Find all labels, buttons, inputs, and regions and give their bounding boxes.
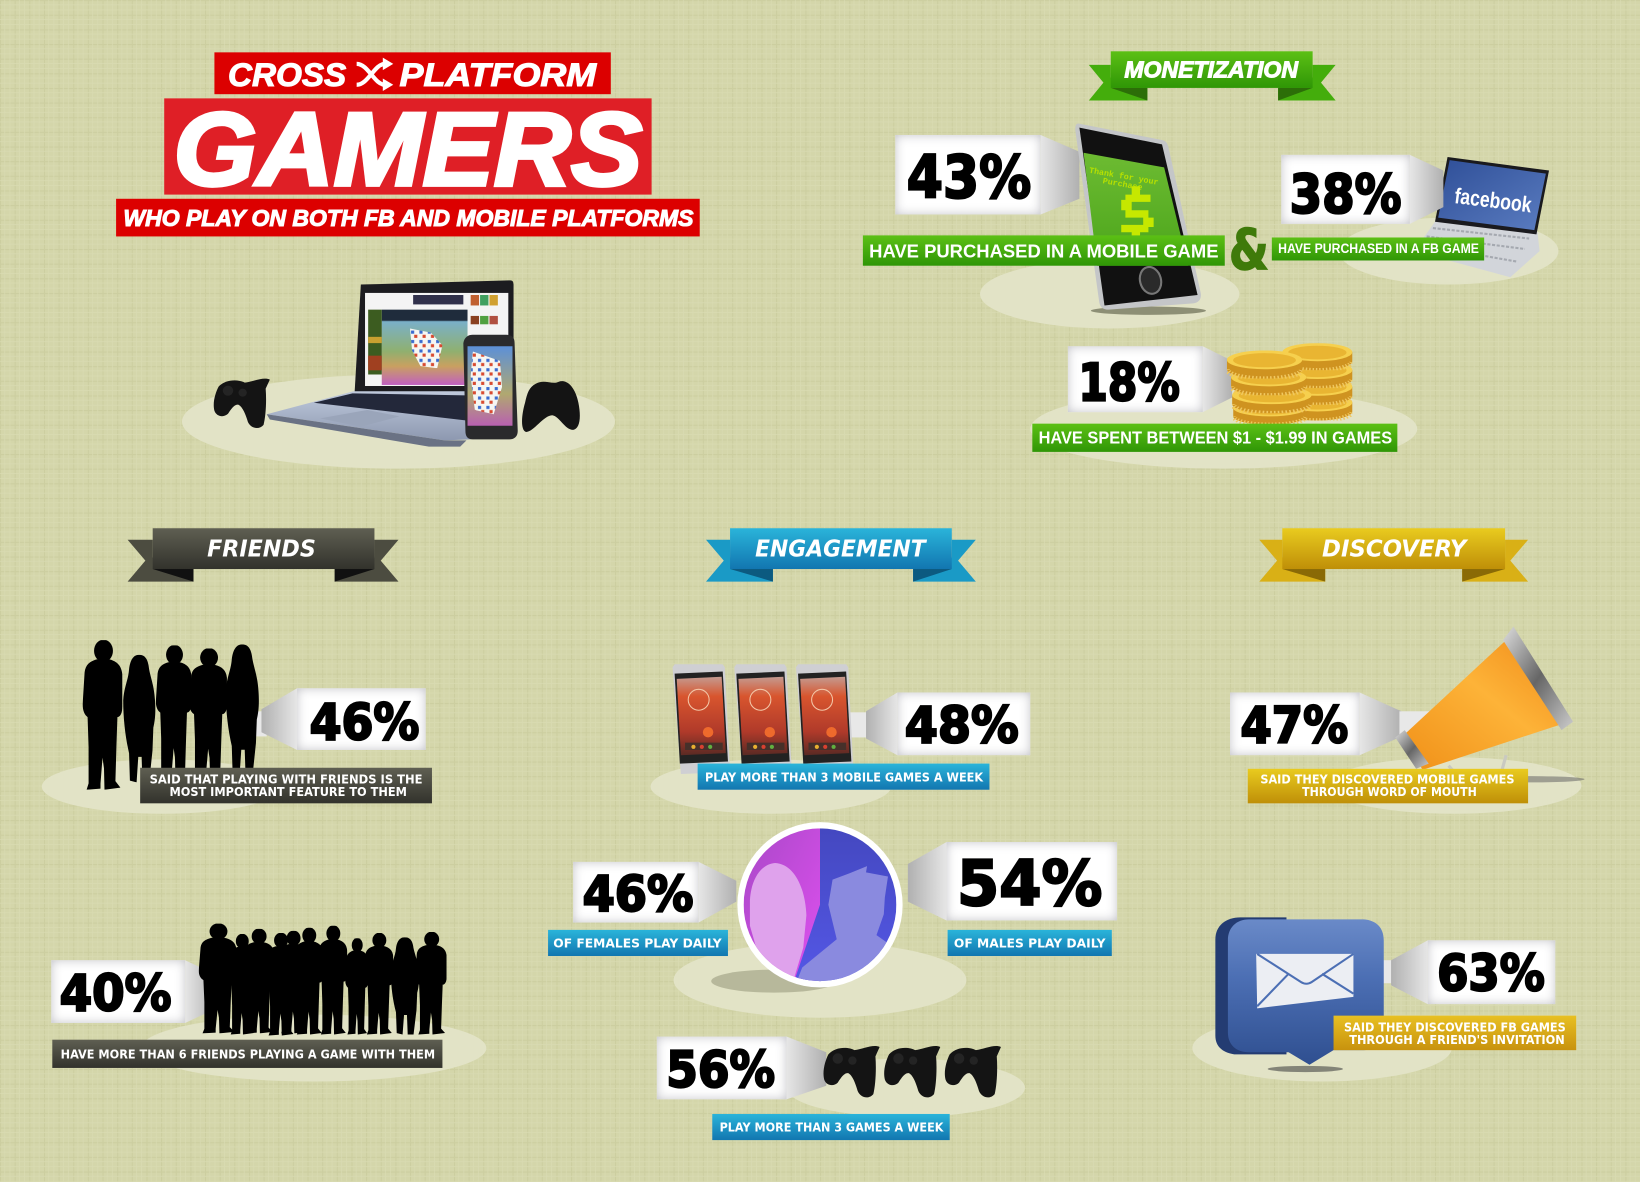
panel: mobile games per week	[651, 664, 1030, 814]
panel: daily play by gender	[548, 822, 1117, 1018]
icon: left controller	[214, 379, 270, 428]
callout: 38%: 38%	[1290, 162, 1402, 225]
label: mobile games	[698, 764, 989, 790]
label: more than 6 friends	[52, 1040, 442, 1068]
ribbon: engagement	[706, 528, 976, 582]
hero devices illustration	[182, 280, 615, 469]
title block	[116, 52, 700, 236]
label: small spenders: HAVE SPENT BETWEEN $1 - $1.99 IN GAMES	[1039, 428, 1392, 448]
callout: 18%	[1068, 346, 1232, 414]
callout: 43%: 43%	[907, 144, 1031, 212]
label: females	[548, 930, 728, 956]
callout: 46%: 46%	[310, 693, 419, 752]
subtitle	[116, 199, 700, 236]
label: fb purchase	[1272, 237, 1484, 260]
callout: 46% females	[573, 862, 736, 923]
panel: friends 46%	[42, 640, 432, 814]
icon: facebook laptop	[1414, 157, 1549, 277]
callout: 48%	[849, 692, 1030, 755]
panel: friend invitation	[1192, 917, 1576, 1082]
ribbon: monetization: MONETIZATION	[1124, 56, 1298, 82]
label: mobile purchase: HAVE PURCHASED IN A MOBILE GAME	[869, 240, 1218, 261]
ribbon: monetization	[1089, 51, 1336, 100]
label: small spenders	[1032, 424, 1397, 452]
label: friend invitation	[1334, 1016, 1576, 1050]
label: games per week: PLAY MORE THAN 3 GAMES A WEEK	[720, 1120, 945, 1135]
callout: 46% females: 46%	[583, 865, 693, 923]
ribbon: discovery: DISCOVERY	[1322, 536, 1469, 562]
callout: 56%	[657, 1037, 826, 1099]
label: games per week	[712, 1114, 950, 1140]
callout: 63%: 63%	[1437, 944, 1545, 1003]
icon: three controllers	[824, 1046, 1001, 1097]
callout: 40%	[51, 960, 217, 1023]
ampersand: &	[1229, 218, 1269, 283]
callout: 48%: 48%	[905, 696, 1019, 755]
icon: laptop	[267, 280, 514, 447]
label: mobile games: PLAY MORE THAN 3 MOBILE GAMES A WEEK	[705, 769, 984, 784]
title line: cross platform: CROSS	[228, 57, 347, 93]
label: more than 6 friends: HAVE MORE THAN 6 FRIENDS PLAYING A GAME WITH THEM	[61, 1047, 435, 1062]
label: mobile purchase	[863, 235, 1225, 266]
callout: 43%	[895, 135, 1079, 214]
callout: 47%: 47%	[1240, 696, 1348, 755]
callout: 18%: 18%	[1078, 354, 1180, 414]
icon: smartphone	[463, 335, 518, 439]
callout: 63%	[1381, 940, 1555, 1004]
label: most important feature: MOST IMPORTANT FEATURE TO THEM	[169, 785, 407, 799]
ribbon: friends	[128, 528, 398, 582]
callout: 56%: 56%	[666, 1040, 775, 1099]
icon: right controller	[522, 381, 580, 432]
icon: coin stacks	[1227, 343, 1352, 425]
icon: message bubble	[1215, 917, 1384, 1065]
panel: games per week	[657, 1037, 1025, 1140]
label: most important feature	[140, 768, 432, 803]
subtitle: WHO PLAY ON BOTH FB AND MOBILE PLATFORMS	[123, 205, 694, 231]
ribbon: engagement: ENGAGEMENT	[755, 536, 928, 562]
icon: three phones	[673, 664, 853, 774]
label: females: OF FEMALES PLAY DAILY	[553, 936, 723, 951]
label: friend invitation: THROUGH A FRIEND'S INVITATION	[1349, 1033, 1565, 1047]
panel: small spenders	[1030, 343, 1417, 469]
panel: friends 40%	[51, 923, 486, 1082]
title line: cross platform	[214, 52, 611, 94]
panel: word of mouth	[1230, 627, 1585, 814]
label: males	[948, 930, 1112, 956]
icon: megaphone	[1395, 627, 1573, 774]
label: word of mouth: THROUGH WORD OF MOUTH	[1302, 785, 1477, 799]
title line: cross platform: PLATFORM	[400, 57, 597, 93]
title: gamers: GAMERS	[174, 91, 642, 207]
label: most important feature: SAID THAT PLAYING WITH FRIENDS IS THE	[150, 772, 423, 786]
label: males: OF MALES PLAY DAILY	[954, 936, 1106, 951]
callout: 54% males: 54%	[957, 847, 1102, 920]
callout: 46%	[235, 688, 426, 752]
icon: group of five silhouettes	[83, 640, 259, 790]
icon: female and male circle	[732, 822, 906, 992]
callout: 47%	[1230, 692, 1436, 755]
icon: phone with dollar: Purchase	[1102, 176, 1143, 193]
ribbon: friends: FRIENDS	[207, 536, 316, 562]
icon: crowd silhouettes	[199, 923, 447, 1036]
panel: facebook purchases	[1272, 155, 1558, 285]
panel: mobile purchases	[863, 123, 1239, 328]
callout: 40%: 40%	[60, 963, 172, 1022]
icon: facebook laptop: facebook	[1453, 183, 1534, 217]
icon: phone with dollar: Thank for your	[1088, 166, 1159, 188]
callout: 54% males	[908, 842, 1117, 920]
icon: phone with dollar	[1075, 123, 1206, 315]
ribbon: discovery	[1259, 528, 1528, 582]
label: word of mouth	[1248, 769, 1528, 803]
label: fb purchase: HAVE PURCHASED IN A FB GAME	[1278, 241, 1479, 256]
label: word of mouth: SAID THEY DISCOVERED MOBILE GAMES	[1260, 772, 1514, 786]
label: friend invitation: SAID THEY DISCOVERED FB GAMES	[1344, 1020, 1566, 1034]
